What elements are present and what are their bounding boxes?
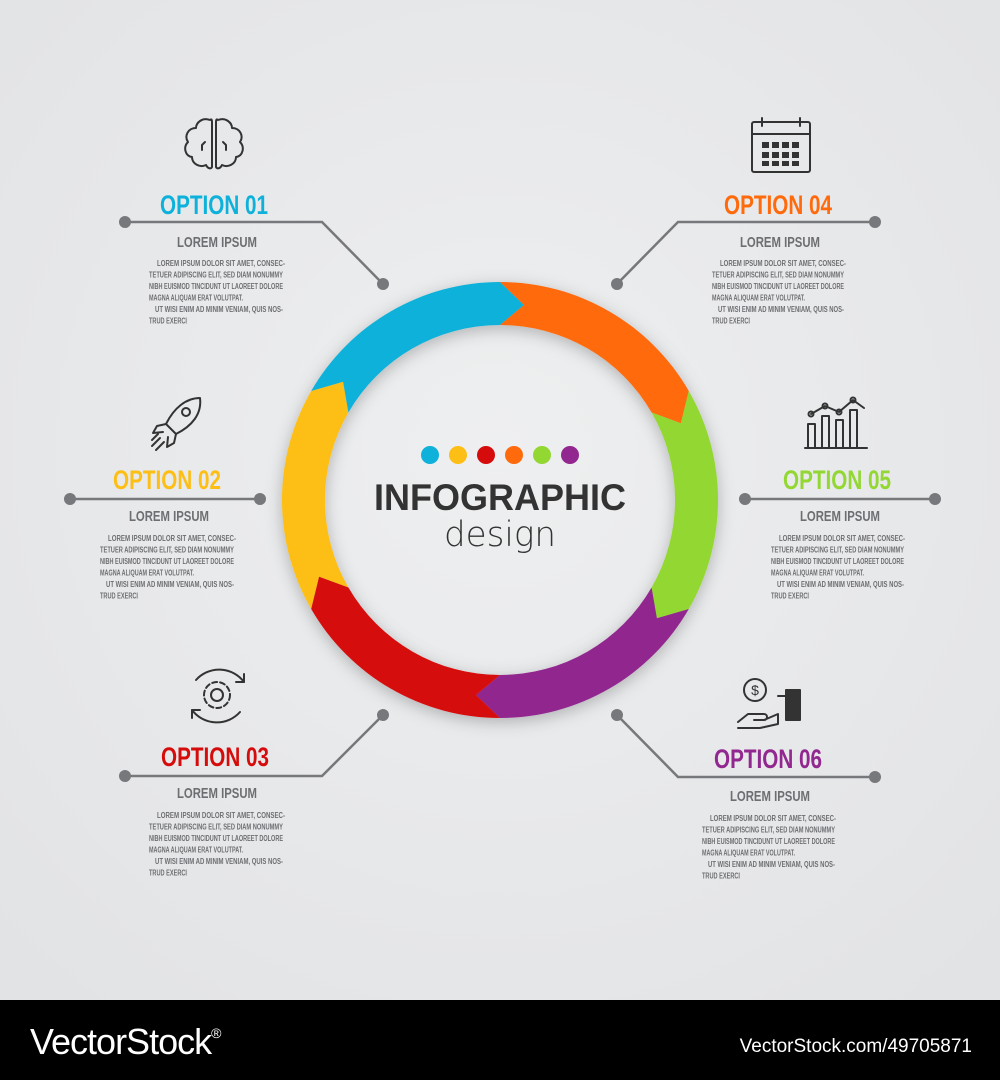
panel: option 05: MAGNA ALIQUAM ERAT VOLUTPAT. (771, 568, 864, 578)
panel: option 03: UT WISI ENIM AD MINIM VENIAM, QUIS NOS- (155, 857, 283, 866)
panel: option 02: TETUER ADIPISCING ELIT, SED DIAM NONUMMY (100, 546, 234, 554)
panel: option 04: OPTION 04 (724, 190, 832, 220)
icon: hand with coin: $ (751, 682, 759, 698)
panel: option 05: TETUER ADIPISCING ELIT, SED DIAM NONUMMY (771, 546, 904, 554)
panel: option 04: LOREM IPSUM DOLOR SIT AMET, CONSEC- (720, 259, 846, 268)
panel: option 02: LOREM IPSUM DOLOR SIT AMET, CONSEC- (108, 534, 236, 543)
panel: option 01: OPTION 01 (160, 190, 268, 220)
panel: option 04: NIBH EUISMOD TINCIDUNT UT LAOREET DOLORE (712, 282, 844, 291)
footer bar: VectorStock (30, 1021, 211, 1062)
panel: option 06: TRUD EXERCI (702, 872, 740, 880)
segment: red (311, 577, 500, 718)
panel: option 03: TRUD EXERCI (149, 868, 187, 878)
panel: option 02: LOREM IPSUM (129, 508, 209, 525)
panel: option 01: NIBH EUISMOD TINCIDUNT UT LAOREET DOLORE (149, 282, 283, 291)
panel: option 03 (149, 670, 285, 878)
panel: option 06: NIBH EUISMOD TINCIDUNT UT LAOREET DOLORE (702, 837, 835, 846)
panel: option 03: OPTION 03 (161, 742, 269, 772)
center title: INFOGRAPHIC (374, 477, 626, 518)
icon: brain (185, 119, 243, 168)
panel: option 04: MAGNA ALIQUAM ERAT VOLUTPAT. (712, 294, 805, 302)
panel: option 02: MAGNA ALIQUAM ERAT VOLUTPAT. (100, 568, 194, 578)
panel: option 02: OPTION 02 (113, 465, 221, 495)
segment: green (652, 391, 718, 618)
panel: option 03: MAGNA ALIQUAM ERAT VOLUTPAT. (149, 846, 243, 854)
icon: bar chart (805, 398, 867, 448)
panel: option 01: LOREM IPSUM DOLOR SIT AMET, CONSEC- (157, 259, 285, 268)
panel: option 05: LOREM IPSUM (800, 508, 880, 525)
panel: option 04: UT WISI ENIM AD MINIM VENIAM, QUIS NOS- (718, 305, 844, 314)
panel: option 01: MAGNA ALIQUAM ERAT VOLUTPAT. (149, 294, 243, 302)
panel: option 01 (149, 119, 285, 326)
icon: rocket (152, 398, 200, 450)
panel: option 06: OPTION 06 (714, 744, 822, 774)
panel: option 01: LOREM IPSUM (177, 234, 257, 251)
panel: option 02: UT WISI ENIM AD MINIM VENIAM, QUIS NOS- (106, 580, 234, 589)
panel: option 02 (100, 398, 236, 600)
segment: blue (311, 282, 524, 412)
panel: option 05: LOREM IPSUM DOLOR SIT AMET, CONSEC- (779, 534, 905, 543)
panel: option 04: TETUER ADIPISCING ELIT, SED DIAM NONUMMY (712, 270, 844, 280)
panel: option 06 (702, 679, 836, 880)
panel: option 04: LOREM IPSUM (740, 234, 820, 251)
segment: orange (500, 282, 689, 423)
center title (374, 446, 626, 555)
footer bar (0, 1000, 1000, 1080)
panel: option 03: TETUER ADIPISCING ELIT, SED DIAM NONUMMY (149, 822, 283, 832)
icon: gear cycle (192, 670, 244, 722)
segment: yellow (282, 382, 348, 609)
center title: design (444, 515, 556, 555)
panel: option 06: UT WISI ENIM AD MINIM VENIAM, QUIS NOS- (708, 860, 835, 869)
panel: option 05: NIBH EUISMOD TINCIDUNT UT LAOREET DOLORE (771, 557, 904, 566)
panel: option 06: MAGNA ALIQUAM ERAT VOLUTPAT. (702, 848, 795, 858)
panel: option 04: TRUD EXERCI (712, 316, 750, 326)
panel: option 02: NIBH EUISMOD TINCIDUNT UT LAOREET DOLORE (100, 557, 234, 566)
panel: option 01: TRUD EXERCI (149, 316, 187, 326)
footer bar: VectorStock.com/49705871 (740, 1036, 972, 1057)
panel: option 01: UT WISI ENIM AD MINIM VENIAM, QUIS NOS- (155, 305, 283, 314)
icon: hand with coin (738, 679, 800, 728)
panel: option 05: TRUD EXERCI (771, 592, 809, 600)
panel: option 03: LOREM IPSUM DOLOR SIT AMET, CONSEC- (157, 811, 285, 820)
panel: option 04 (712, 118, 846, 326)
panel: option 03: NIBH EUISMOD TINCIDUNT UT LAOREET DOLORE (149, 834, 283, 843)
footer bar: ® (211, 1025, 222, 1041)
segment: purple (476, 588, 689, 718)
connector lines (64, 216, 941, 783)
panel: option 02: TRUD EXERCI (100, 592, 138, 600)
panel: option 06: LOREM IPSUM DOLOR SIT AMET, CONSEC- (710, 814, 836, 823)
panel: option 06: LOREM IPSUM (730, 788, 810, 805)
panel: option 01: TETUER ADIPISCING ELIT, SED DIAM NONUMMY (149, 270, 283, 280)
panel: option 05 (771, 398, 905, 600)
ring diagram (282, 282, 718, 718)
icon: calendar (752, 118, 810, 172)
panel: option 05: UT WISI ENIM AD MINIM VENIAM, QUIS NOS- (777, 580, 904, 589)
panel: option 05: OPTION 05 (783, 465, 891, 495)
panel: option 03: LOREM IPSUM (177, 785, 257, 802)
panel: option 06: TETUER ADIPISCING ELIT, SED DIAM NONUMMY (702, 826, 835, 834)
